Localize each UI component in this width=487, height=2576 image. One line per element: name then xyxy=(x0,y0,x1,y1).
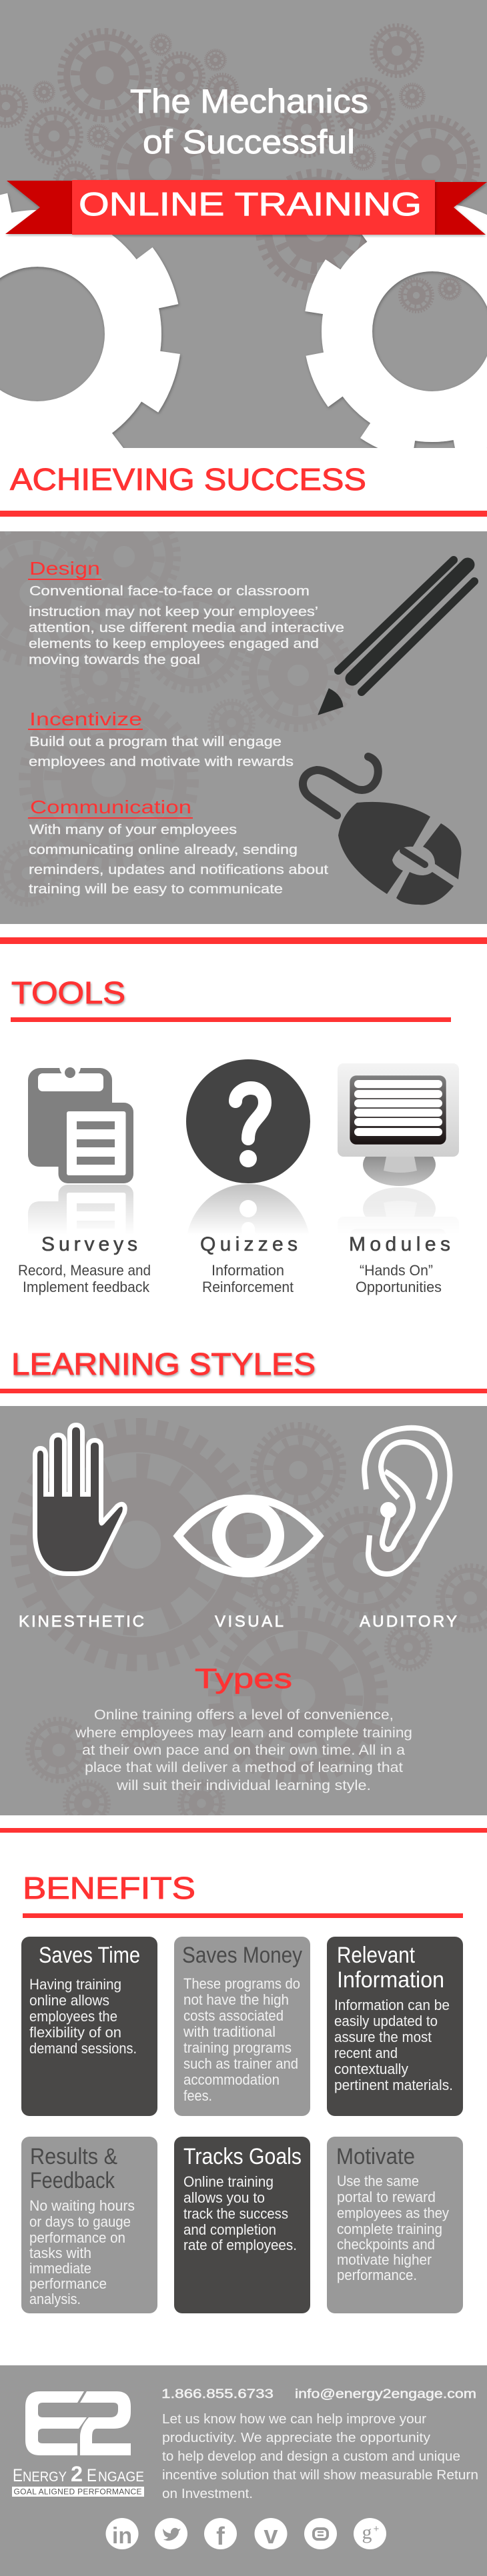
card: saves money: with traditional xyxy=(183,2023,276,2040)
card: motivate: complete training xyxy=(337,2221,442,2237)
ribbon banner: online training xyxy=(5,180,487,235)
card: tracks goals: Tracks Goals xyxy=(183,2144,302,2169)
card: relevant information xyxy=(327,1937,463,2116)
icon: linkedin: in xyxy=(112,2523,132,2549)
icon: hand xyxy=(37,1427,123,1571)
description: surveys: Implement feedback xyxy=(23,1279,150,1295)
text block: communication: communicating online already, sending xyxy=(29,843,298,857)
heading: benefits: BENEFITS xyxy=(23,1871,195,1905)
card: saves time: demand sessions. xyxy=(29,2040,137,2057)
card: motivate xyxy=(327,2137,463,2313)
text block: design: Design xyxy=(29,558,100,579)
label: kinesthetic: KINESTHETIC xyxy=(19,1613,144,1631)
icon: monitor xyxy=(338,1063,459,1186)
icon: vimeo: v xyxy=(264,2521,278,2549)
heading: learning styles xyxy=(0,1347,487,1393)
icon: linkedin xyxy=(105,2518,139,2549)
text block: design: Conventional face-to-face or classroom xyxy=(29,584,310,599)
card: saves time xyxy=(21,1937,157,2116)
card: tracks goals: and completion xyxy=(183,2221,276,2238)
text block: call to action xyxy=(162,2412,478,2501)
card: motivate: portal to reward xyxy=(337,2189,436,2205)
card: saves money: costs associated xyxy=(183,2007,284,2024)
card: relevant information: contextually xyxy=(334,2061,408,2077)
label: visual: VISUAL xyxy=(215,1613,284,1631)
heading: tools: TOOLS xyxy=(11,975,125,1010)
card: saves time: Having training xyxy=(29,1976,121,1993)
card: results and feedback: performance xyxy=(29,2275,107,2292)
icon: clipboard xyxy=(28,1056,133,1183)
card: relevant information: Information xyxy=(337,1967,444,1993)
icon reflection: question mark xyxy=(189,1184,307,1228)
icon: computer mouse xyxy=(303,757,461,905)
card: relevant information: Information can be xyxy=(334,1997,450,2013)
card: saves money: These programs do xyxy=(183,1975,300,1992)
logo: energy 2 engage: GOAL ALIGNED PERFORMANCE xyxy=(13,2487,141,2496)
card: saves money: such as trainer and xyxy=(183,2055,298,2072)
card: motivate: Motivate xyxy=(336,2144,415,2169)
panel: achieving success xyxy=(0,504,487,924)
text block: types description: at their own pace and on their own time. All in a xyxy=(82,1743,405,1758)
title: The Mechanics xyxy=(130,83,368,120)
card: saves time: flexibility of on xyxy=(29,2024,121,2041)
description: surveys xyxy=(18,1262,151,1295)
text block: call to action: incentive solution that will show measurable Return xyxy=(162,2468,478,2483)
card: saves money: accommodation xyxy=(183,2071,280,2088)
icon: ear xyxy=(364,1428,450,1574)
card: tracks goals: Online training xyxy=(183,2173,274,2190)
text block: incentivize: Incentivize xyxy=(29,709,142,729)
label: quizzes: Quizzes xyxy=(200,1233,298,1255)
card: motivate: performance. xyxy=(337,2267,417,2283)
card: relevant information: assure the most xyxy=(334,2029,432,2045)
card: results and feedback: Feedback xyxy=(30,2168,115,2193)
heading: achieving success xyxy=(0,462,487,517)
ribbon banner: online training: ONLINE TRAINING xyxy=(79,187,422,223)
card: motivate: motivate higher xyxy=(337,2251,432,2268)
logo: energy 2 engage: E xyxy=(87,2465,97,2485)
text block: communication: With many of your employees xyxy=(29,823,237,837)
text block: incentivize: Build out a program that will engage xyxy=(29,735,282,749)
logo: energy 2 engage: NERGY xyxy=(23,2469,67,2485)
panel: learning styles xyxy=(0,1406,487,1825)
description: quizzes: Information xyxy=(211,1262,284,1279)
card: tracks goals: rate of employees. xyxy=(183,2237,297,2253)
text block: design: elements to keep employees engaged and xyxy=(29,637,319,651)
heading: learning styles: LEARNING STYLES xyxy=(11,1347,316,1381)
description: quizzes: Reinforcement xyxy=(202,1279,294,1295)
card: saves time: online allows xyxy=(29,1992,109,2009)
card: tracks goals: allows you to xyxy=(183,2189,265,2206)
card: saves money: fees. xyxy=(183,2087,212,2104)
description: modules: “Hands On” xyxy=(360,1262,433,1279)
heading: benefits xyxy=(23,1871,463,1918)
card: motivate: Use the same xyxy=(337,2173,419,2189)
text block: types description: where employees may learn and complete training xyxy=(75,1725,412,1741)
panel: footer xyxy=(0,2365,487,2576)
contact email: info@energy2engage.com xyxy=(295,2387,476,2401)
logo: energy 2 engage: 2 xyxy=(71,2462,83,2486)
card: results and feedback: immediate xyxy=(29,2260,91,2277)
text block: incentivize: employees and motivate with rewards xyxy=(29,755,294,769)
icon: eye xyxy=(178,1499,319,1573)
icon: twitter xyxy=(155,2518,187,2549)
text block: design: instruction may not keep your employees’ xyxy=(29,605,318,619)
icon: facebook: f xyxy=(216,2523,225,2551)
text block: call to action: Let us know how we can help improve your xyxy=(162,2412,426,2427)
card: tracks goals: track the success xyxy=(183,2205,288,2222)
text block: call to action: on Investment. xyxy=(162,2487,253,2501)
icon: google plus: + xyxy=(374,2523,380,2535)
description: modules xyxy=(356,1262,442,1295)
card: relevant information: Relevant xyxy=(337,1943,415,1968)
logo: energy 2 engage xyxy=(12,2391,144,2497)
card: saves money: training programs xyxy=(183,2039,292,2056)
text block: communication: training will be easy to communicate xyxy=(29,882,283,897)
icon: vimeo xyxy=(255,2518,287,2549)
card: relevant information: recent and xyxy=(334,2045,398,2061)
description: modules: Opportunities xyxy=(356,1279,442,1295)
icon: large white gear right xyxy=(314,213,487,450)
text block: design: attention, use different media and interactive xyxy=(29,621,344,635)
card: results and feedback: performance on xyxy=(29,2229,125,2246)
text block: types description: place that will deliver a method of learning that xyxy=(85,1760,403,1775)
card: results and feedback: analysis. xyxy=(29,2291,81,2307)
card: motivate: employees as they xyxy=(337,2205,449,2221)
card: results and feedback: No waiting hours xyxy=(29,2197,135,2214)
icon: pencil xyxy=(318,560,474,715)
card: results and feedback: or days to gauge xyxy=(29,2213,131,2230)
card: results and feedback: tasks with xyxy=(29,2245,91,2261)
text block: communication xyxy=(28,797,329,897)
logo: energy 2 engage: E xyxy=(13,2465,23,2485)
contact phone: 1.866.855.6733 xyxy=(161,2387,274,2401)
card: relevant information: pertinent materials. xyxy=(334,2077,453,2093)
title: of Successful xyxy=(143,123,355,161)
heading: tools xyxy=(11,975,451,1022)
text block: types description: Online training offers a level of convenience, xyxy=(94,1707,394,1723)
panel: header hero xyxy=(0,0,487,467)
text block: incentivize xyxy=(28,709,294,769)
text block: design xyxy=(28,558,344,667)
card: motivate: checkpoints and xyxy=(337,2236,435,2253)
text block: communication: reminders, updates and notifications about xyxy=(29,863,329,877)
card: saves time: employees the xyxy=(29,2008,117,2025)
card: results and feedback: Results & xyxy=(30,2144,117,2169)
divider bar xyxy=(0,1828,487,1833)
card: tracks goals xyxy=(174,2137,310,2313)
tool: modules xyxy=(338,1063,459,1310)
heading: achieving success: ACHIEVING SUCCESS xyxy=(10,462,366,497)
card: relevant information: easily updated to xyxy=(334,2013,438,2029)
card: saves time: Saves Time xyxy=(39,1943,140,1968)
icon: question mark xyxy=(186,1059,310,1183)
title xyxy=(130,83,368,161)
description: surveys: Record, Measure and xyxy=(18,1262,151,1279)
icon: google plus xyxy=(354,2518,386,2549)
card: saves money: not have the high xyxy=(183,1991,289,2008)
icon: google plus: g xyxy=(362,2521,372,2543)
icon reflection: clipboard xyxy=(28,1185,133,1224)
logo: energy 2 engage: NGAGE xyxy=(98,2469,144,2485)
description: quizzes xyxy=(202,1262,294,1295)
card: saves money: Saves Money xyxy=(182,1943,302,1968)
text block: call to action: productivity. We appreciate the opportunity xyxy=(162,2431,430,2445)
card: saves money xyxy=(174,1937,310,2116)
icon: blogger xyxy=(304,2518,337,2549)
icon: large white gear left xyxy=(0,201,171,467)
card: results and feedback xyxy=(21,2137,157,2313)
icon: facebook xyxy=(204,2518,237,2551)
heading: types: Types xyxy=(195,1663,292,1694)
text block: communication: Communication xyxy=(30,797,191,817)
text block: call to action: to help develop and design a custom and unique xyxy=(162,2449,460,2464)
icon reflection: monitor xyxy=(363,1187,436,1217)
label: modules: Modules xyxy=(349,1233,450,1255)
divider bar xyxy=(0,937,487,944)
tool: quizzes xyxy=(186,1059,310,1308)
text block: design: moving towards the goal xyxy=(29,653,200,667)
text block: types description: will suit their individual learning style. xyxy=(116,1778,371,1793)
label: auditory: AUDITORY xyxy=(360,1613,457,1631)
label: surveys: Surveys xyxy=(41,1233,137,1255)
tool: surveys xyxy=(18,1056,151,1312)
text block: types description xyxy=(75,1707,412,1793)
